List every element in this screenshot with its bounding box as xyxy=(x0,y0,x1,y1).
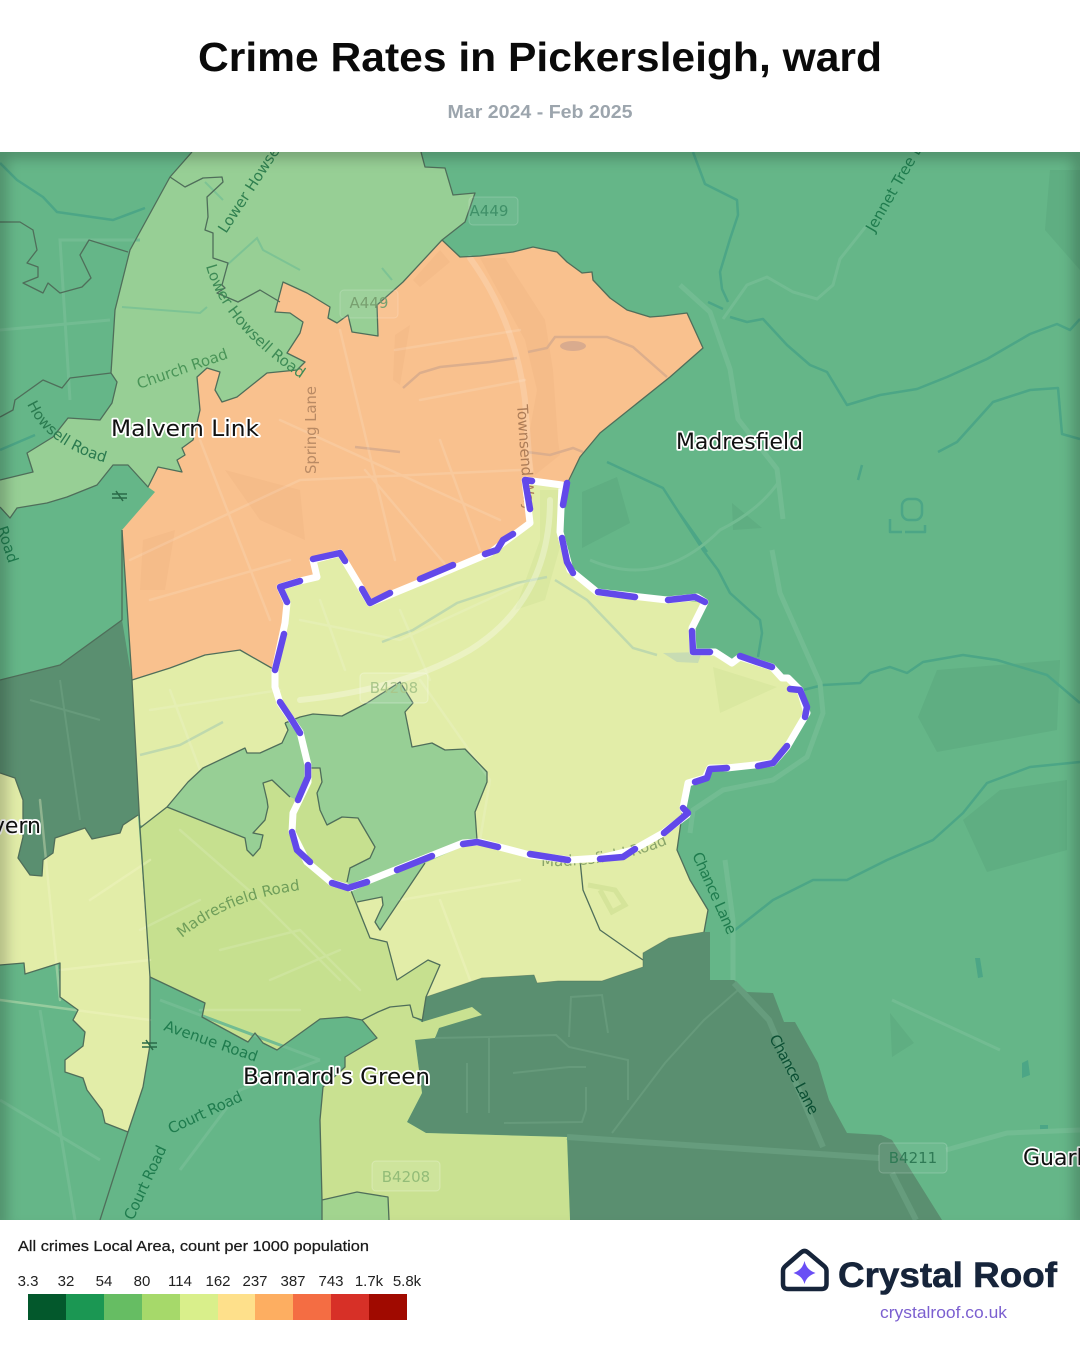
badge: A449 xyxy=(340,290,398,318)
label: Townsend Way: Townsend Way xyxy=(513,403,538,512)
title: Crime Rates in Pickersleigh, ward xyxy=(198,34,882,80)
logo wordmark: Crystal Roof xyxy=(838,1256,1057,1295)
area: lime ward Madresfield xyxy=(140,768,440,1050)
road network xyxy=(0,225,1080,1220)
subtitle: date range: Mar 2024 - Feb 2025 xyxy=(448,102,632,122)
legend scale labels xyxy=(18,1273,422,1290)
label: Spring Lane: Spring Lane xyxy=(302,386,320,474)
legend scale labels: 387 xyxy=(280,1273,306,1290)
place labels xyxy=(0,417,1080,1171)
label: Church Road: Church Road xyxy=(134,345,230,393)
label: Court Road south: Court Road xyxy=(120,1143,170,1223)
label: Madresfield Road west: Madresfield Road xyxy=(176,878,299,937)
Pickersleigh boundary: purple dashes xyxy=(275,480,807,888)
place: Madresfield: Madresfield xyxy=(676,430,803,455)
legend scale labels: 114 xyxy=(168,1273,192,1290)
area: lime ward Barnard's Green xyxy=(320,1005,570,1220)
badge: A449 north xyxy=(469,197,518,225)
legend xyxy=(18,1238,422,1320)
area: pale yellow wards centre and south xyxy=(132,480,807,997)
icons: railway stations xyxy=(112,491,157,1050)
area: orange ward building patches xyxy=(140,250,560,590)
area: light green wards north xyxy=(0,152,475,518)
label: Lower Howsell Road north: Lower Howsell Road xyxy=(214,100,311,236)
area: base green wards xyxy=(0,152,1080,1220)
badge: B4211: B4211 xyxy=(889,1149,937,1167)
legend scale labels: 32 xyxy=(58,1273,74,1290)
badge: B4208 south xyxy=(372,1161,440,1191)
label: Jennet Tree Lane: Jennet Tree Lane xyxy=(861,118,940,236)
legend scale labels: 162 xyxy=(205,1273,231,1290)
legend scale labels: 237 xyxy=(242,1273,268,1290)
road labels xyxy=(0,152,921,1263)
area: pale field and embankment patches xyxy=(521,544,776,700)
label: Madresfield Road east: Madresfield Road xyxy=(542,836,666,866)
area: darker field patches xyxy=(583,478,1049,1056)
legend scale labels: 1.7k xyxy=(355,1273,384,1290)
label: Chance Lane south: Chance Lane xyxy=(765,1031,823,1118)
road number badges xyxy=(340,197,947,1191)
icon: purple star xyxy=(794,1261,816,1284)
legend scale labels: 54 xyxy=(96,1273,112,1290)
label: Court Road east: Court Road xyxy=(165,1088,245,1138)
legend colour bar xyxy=(28,1294,407,1320)
ward boundary lines xyxy=(0,152,708,1220)
area: mid green ward bottom xyxy=(322,1192,389,1220)
badge: B4211 xyxy=(879,1143,947,1173)
badge: B4208 south: B4208 xyxy=(382,1168,430,1186)
area: pale yellow ward west xyxy=(0,773,150,1132)
place: Barnard's Green: Barnard's Green xyxy=(243,1065,430,1090)
legend scale labels: 5.8k xyxy=(393,1273,422,1290)
Crystal Roof logo xyxy=(783,1251,1057,1322)
logo website: crystalroof.co.uk xyxy=(880,1304,1008,1322)
legend scale labels: 743 xyxy=(318,1273,344,1290)
legend title: All crimes Local Area, count per 1000 population xyxy=(18,1238,369,1255)
legend scale labels: 80 xyxy=(134,1273,150,1290)
icon: house outline xyxy=(783,1251,826,1289)
label: Lower Howsell Road: Lower Howsell Road xyxy=(206,264,306,378)
badge: A449: A449 xyxy=(350,294,388,312)
label: Howsell Road: Howsell Road xyxy=(28,400,107,462)
badge: A449 north: A449 xyxy=(470,202,508,220)
streams xyxy=(0,152,1080,1133)
area: orange ward Malvern Link xyxy=(122,240,703,680)
badge: B4208 north xyxy=(360,673,428,703)
legend scale labels: 3.3 xyxy=(18,1273,38,1290)
area: mid green ward inside Pickersleigh xyxy=(167,682,487,930)
label: Chance Lane north: Chance Lane xyxy=(688,849,741,937)
area: dark ward south-east xyxy=(407,932,942,1220)
area: dark ward west xyxy=(0,620,140,876)
badge: B4208 north: B4208 xyxy=(370,679,418,697)
label: Avenue Road: Avenue Road xyxy=(162,1017,260,1066)
Pickersleigh boundary: white base xyxy=(275,480,807,888)
place: Malvern Link: Malvern Link xyxy=(111,417,259,442)
